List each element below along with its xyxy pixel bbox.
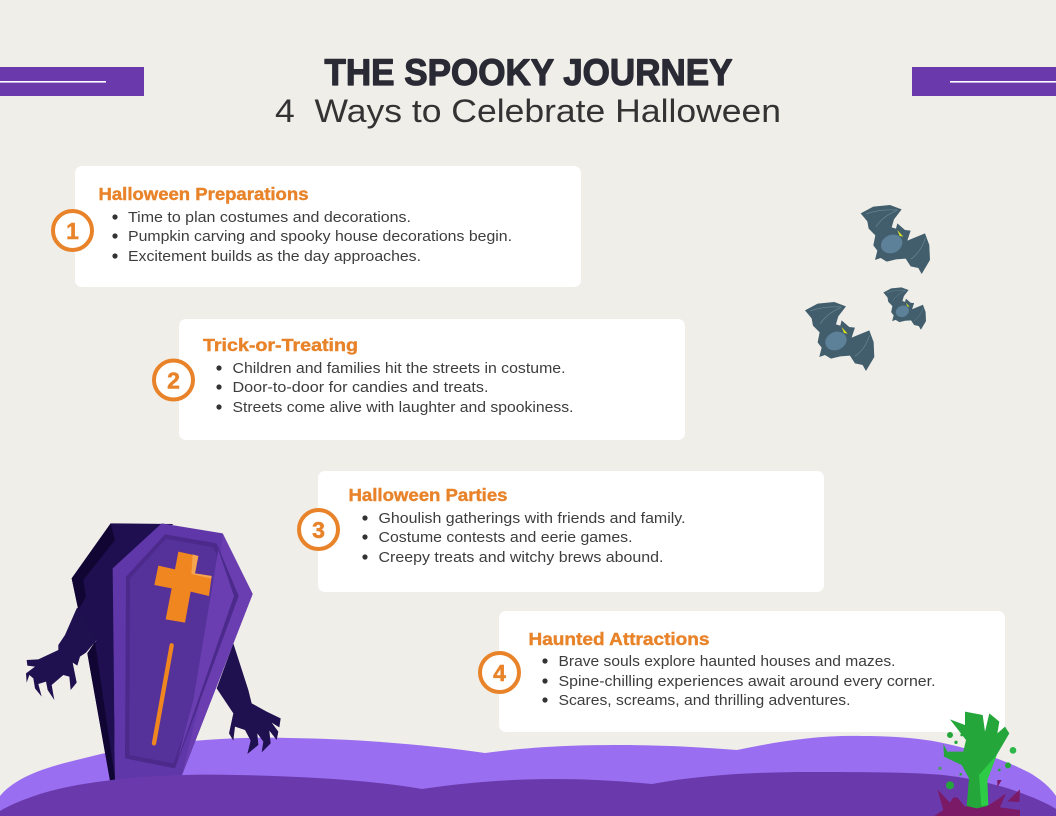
bullets: Brave souls explore haunted houses and mazes.	[558, 654, 896, 670]
bat left	[805, 302, 874, 371]
bullets: Excitement builds as the day approaches.	[128, 249, 421, 265]
title: THE SPOOKY JOURNEY	[324, 52, 733, 93]
number badge 3: 3	[312, 517, 325, 543]
bullets: Spine-chilling experiences await around every corner.	[558, 674, 936, 690]
bullets	[362, 511, 686, 566]
number badge 2	[154, 360, 193, 400]
panel: halloween preparations	[53, 166, 581, 287]
coffin slit	[154, 645, 172, 743]
light ground hill	[0, 736, 1056, 816]
number badge 4: 4	[493, 660, 506, 686]
bullets	[112, 210, 512, 265]
number badge 1: 1	[66, 218, 79, 244]
heading: Trick-or-Treating	[203, 335, 358, 355]
coffin front	[113, 523, 253, 780]
left arm	[26, 600, 97, 700]
number badge 3	[299, 510, 338, 549]
green droplets	[938, 732, 1016, 789]
right arm	[217, 643, 281, 754]
bullets: Creepy treats and witchy brews abound.	[378, 550, 664, 566]
number badge 4	[480, 653, 519, 692]
bullets	[216, 361, 574, 416]
bullets: Time to plan costumes and decorations.	[128, 210, 411, 226]
subtitle: 4 Ways to Celebrate Halloween	[275, 93, 781, 129]
bats	[805, 205, 930, 371]
coffin back	[72, 523, 173, 781]
heading: Halloween Preparations	[98, 184, 309, 204]
bullets: Door-to-door for candies and treats.	[232, 380, 488, 396]
bullets: Pumpkin carving and spooky house decorations begin.	[128, 229, 512, 245]
panel: haunted attractions	[480, 611, 1005, 732]
left header bar	[0, 67, 144, 96]
bullets: Streets come alive with laughter and spookiness.	[232, 400, 574, 416]
number badge 1	[53, 211, 92, 250]
heading: Halloween Parties	[348, 485, 508, 505]
bullets: Ghoulish gatherings with friends and family.	[378, 511, 686, 527]
bullets: Costume contests and eerie games.	[378, 530, 632, 546]
coffin with arms	[26, 523, 281, 781]
heading: Haunted Attractions	[528, 629, 710, 649]
dark ground hill	[0, 772, 1056, 816]
bullets: Children and families hit the streets in costume.	[232, 361, 566, 377]
bullets	[542, 654, 936, 709]
panel: halloween parties	[299, 471, 824, 592]
bat small	[883, 287, 926, 330]
hand	[943, 712, 1009, 808]
bullets: Scares, screams, and thrilling adventures.	[558, 693, 850, 709]
right header bar	[912, 67, 1056, 96]
ground splat	[934, 789, 1020, 816]
zombie hand	[934, 712, 1020, 816]
panel: trick-or-treating	[154, 319, 685, 440]
number badge 2: 2	[167, 368, 180, 394]
cross	[154, 552, 212, 623]
bat top	[861, 205, 930, 274]
